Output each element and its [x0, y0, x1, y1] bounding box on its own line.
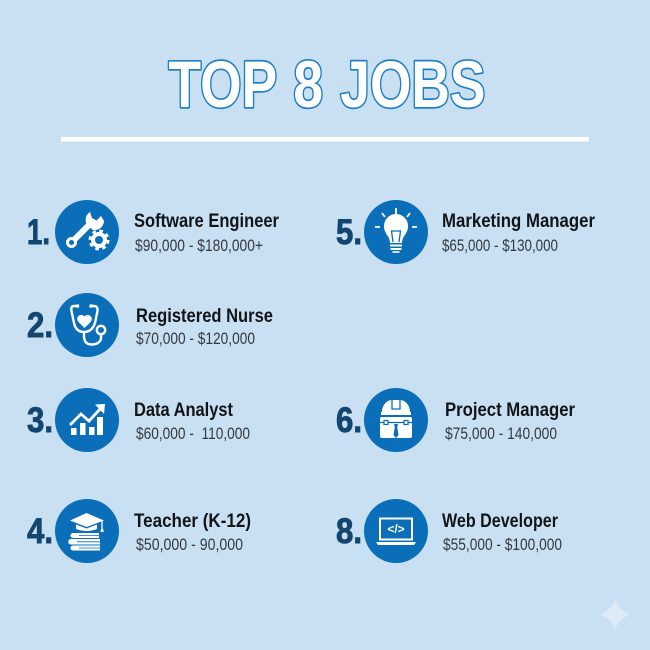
job 6: project manager: [336, 388, 575, 452]
job 3: data analyst: [27, 388, 250, 452]
number 6: 6.: [336, 401, 362, 440]
job 8: web developer: [336, 499, 562, 563]
salary: $65,000 - $130,000: [442, 237, 558, 255]
icon: graduation cap on books: [55, 499, 119, 563]
job name: Data Analyst: [134, 399, 233, 421]
salary: $50,000 - 90,000: [136, 536, 243, 554]
icon: wrench and gear: [55, 200, 119, 264]
job name: Software Engineer: [134, 210, 279, 232]
job 1: software engineer: [27, 200, 279, 264]
icon: stethoscope with heart: [55, 293, 119, 357]
icon: laptop with code: </>: [387, 522, 405, 536]
job name: Registered Nurse: [136, 305, 273, 327]
salary: $70,000 - $120,000: [136, 330, 255, 348]
number 2: 2.: [27, 306, 53, 345]
icon: sparkle watermark: [600, 599, 630, 630]
job name: Project Manager: [445, 399, 575, 421]
job 5: marketing manager: [336, 200, 595, 264]
number 5: 5.: [336, 213, 362, 252]
job name: Web Developer: [442, 510, 558, 532]
icon: light bulb: [364, 200, 428, 264]
title: TOP 8 JOBS: [168, 47, 486, 121]
number 8: 8.: [336, 512, 362, 551]
job 4: teacher: [27, 499, 251, 563]
salary: $60,000 - 110,000: [136, 425, 250, 443]
salary: $75,000 - 140,000: [445, 425, 557, 443]
icon: laptop with code: [364, 499, 428, 563]
job name: Marketing Manager: [442, 210, 595, 232]
job 2: registered nurse: [27, 293, 273, 357]
job name: Teacher (K-12): [134, 510, 251, 532]
salary: $55,000 - $100,000: [443, 536, 562, 554]
number 3: 3.: [27, 401, 53, 440]
salary: $90,000 - $180,000+: [135, 237, 263, 255]
icon: hard hat and toolbox: [364, 388, 428, 452]
number 4: 4.: [27, 512, 53, 551]
number 1: 1.: [27, 213, 50, 252]
icon: rising bar chart: [55, 388, 119, 452]
